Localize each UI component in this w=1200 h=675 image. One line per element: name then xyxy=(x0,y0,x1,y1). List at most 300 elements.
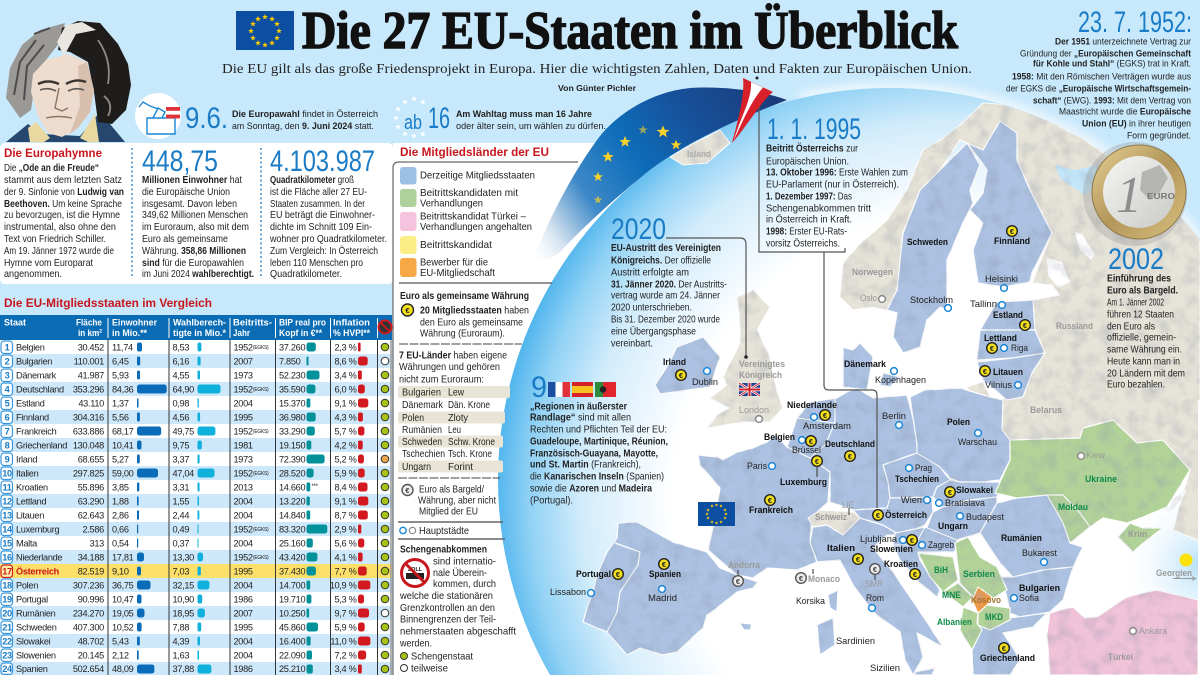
row: Kroatien: 11 xyxy=(2,482,12,492)
timeline: 1.1.1995: in Österreich in Kraft. xyxy=(766,214,852,226)
table header: Fläche xyxy=(76,318,102,328)
row: Finnland xyxy=(0,410,392,424)
map labels: candidates (green): MKD xyxy=(985,612,1003,623)
legend: Schengen: werden. xyxy=(399,638,432,650)
row: Bulgarien: 2 xyxy=(5,356,10,366)
Greece xyxy=(972,613,1047,675)
row: Luxemburg: Luxemburg xyxy=(16,524,59,534)
Finland xyxy=(967,121,1052,287)
map labels: member states: Ungarn xyxy=(938,521,968,532)
table header: tigte in Mio.* xyxy=(173,328,226,339)
row: Frankreich xyxy=(0,424,392,438)
row: Rumänien: 20 xyxy=(2,608,12,618)
Slovakia xyxy=(933,480,1000,507)
panel: area: EU beträgt die Einwohner- xyxy=(270,210,375,221)
row: Polen xyxy=(0,578,392,592)
legend: currencies table: Tsch. Krone xyxy=(448,449,492,460)
row: Slowakei: 5,43 xyxy=(112,636,129,646)
map markers: euro countries: € xyxy=(848,452,853,461)
Baltics xyxy=(967,300,1045,400)
row: Estland: 15.370 xyxy=(279,398,305,408)
timeline: 2020: 31. Jänner 2020. Der Austritts- xyxy=(611,280,727,290)
panel: population: die Europäische Union xyxy=(142,187,230,198)
row: Malta xyxy=(0,536,392,550)
table header: Einwohner xyxy=(112,318,157,328)
map labels: member states: Belgien xyxy=(764,432,795,443)
legend: Schengen: nehmerstaaten abgeschafft xyxy=(400,626,516,638)
North Macedonia xyxy=(978,605,1010,630)
panel: population: 448,75 xyxy=(142,145,218,178)
row: Estland: 0,98 xyxy=(172,398,189,408)
row: Litauen: 2004 xyxy=(234,510,253,520)
row: Lettland: 1,88 xyxy=(112,496,129,506)
row: Spanien xyxy=(0,662,392,675)
table header: Kopf in €** xyxy=(279,328,322,339)
Turkey xyxy=(1047,590,1198,675)
row: Malta: Malta xyxy=(16,538,38,548)
row: Lettland: Lettland xyxy=(16,496,46,506)
Sicily xyxy=(915,668,935,675)
panel: population: im Juni 2024 wahlberechtigt. xyxy=(142,269,254,280)
row: Österreich: 37.430 xyxy=(279,566,305,576)
timeline: 2020: Königreichs. Der offizielle xyxy=(611,256,711,266)
row: Luxemburg: 2.586 xyxy=(82,524,104,534)
legend: Schengen: Schengenabkommen xyxy=(400,545,487,556)
timeline: 2002: 2002 xyxy=(1108,243,1164,276)
row: Deutschland: 1952 xyxy=(234,384,253,394)
legend: currencies table xyxy=(398,386,510,473)
row: Dänemark: 3 xyxy=(5,370,10,380)
Kosovo xyxy=(972,587,992,613)
Italy xyxy=(810,518,943,675)
row: Dänemark: 5,93 xyxy=(112,370,129,380)
table header: Jahr xyxy=(233,328,250,339)
row: Belgien: 2,3 % xyxy=(334,342,357,352)
legend: member status: Verhandlungen angehalten xyxy=(420,222,532,233)
row: Italien: 10 xyxy=(2,468,12,478)
map labels: member states: Slowakei xyxy=(956,485,993,496)
timeline: 23.7.1952: Union (EU) in ihrer heutigen xyxy=(1082,118,1191,130)
row: Spanien: 3,4 % xyxy=(334,664,357,674)
panel: Europahymne: angenommen. xyxy=(4,269,62,280)
panel: Europahymne: Die Europahymne xyxy=(4,146,102,160)
map labels: capitals and islands: Budapest xyxy=(966,512,1004,523)
voting age text: oder älter sein, um wählen zu dürfen. xyxy=(456,121,606,132)
row: Kroatien xyxy=(0,480,392,494)
legend: euro as cash: Währung, aber nicht xyxy=(418,496,496,506)
map labels: non-members (grey): Norwegen xyxy=(852,267,893,278)
row: Kroatien: Kroatien xyxy=(16,482,48,492)
map markers: euro countries: € xyxy=(876,511,881,520)
row: Irland: Irland xyxy=(16,454,37,464)
row: Irland: 5,27 xyxy=(112,454,129,464)
timeline: 2020: 2020 xyxy=(611,213,666,246)
row: Griechenland: 4,2 % xyxy=(334,440,357,450)
row: Portugal: 10,90 xyxy=(172,594,194,604)
row: Slowakei xyxy=(0,634,392,648)
legend: Schengen: sind internatio- xyxy=(433,556,496,568)
panel: area: wohner pro Quadratkilometer. xyxy=(269,234,387,245)
map labels: capitals and islands: Wien xyxy=(901,495,922,506)
timeline: 1.1.1995: 13. Oktober 1996: Erste Wahlen zum xyxy=(766,168,908,178)
row: Rumänien: 10.250 xyxy=(279,608,305,618)
map labels: capitals and islands: Brüssel xyxy=(792,445,821,456)
row: Dänemark: 3,4 % xyxy=(334,370,357,380)
row: Bulgarien: 6,45 xyxy=(112,356,129,366)
row: Italien: 5,9 % xyxy=(334,468,357,478)
row: Griechenland: 1981 xyxy=(234,440,253,450)
map labels: member states: Frankreich xyxy=(749,505,793,516)
map labels: capitals and islands: Prag xyxy=(915,463,932,474)
map markers: euro countries: € xyxy=(910,536,915,545)
map labels: non-members (grey): Andorra xyxy=(728,560,761,571)
row: Slowenien: Slowenien xyxy=(16,650,56,660)
election date text: Die Europawahl findet in Österreich xyxy=(232,109,378,120)
legend: currencies table: Polen xyxy=(402,413,424,424)
map labels: candidates (green): BiH xyxy=(934,565,948,576)
row: Irland: 1973 xyxy=(234,454,253,464)
timeline: 2002: same Währung ein. xyxy=(1107,344,1182,356)
table header: Staat xyxy=(4,318,27,328)
Czechia xyxy=(883,453,950,498)
row: Malta: 0,54 xyxy=(112,538,129,548)
row: Lettland: 13.220 xyxy=(279,496,305,506)
row: Belgien: 1 xyxy=(5,342,10,352)
row: Litauen: 8,7 % xyxy=(334,510,357,520)
row: Slowakei: 11,0 % xyxy=(330,636,357,646)
flag: France xyxy=(548,382,570,397)
map labels: member states: Bulgarien xyxy=(1019,583,1060,594)
timeline: 2002: den Euro als xyxy=(1107,322,1155,332)
map labels: non-members (grey): Königreich xyxy=(739,370,782,381)
callout: outermost regions xyxy=(530,371,668,506)
callout: outermost regions: die Kanarischen Inseln (Spanien) xyxy=(530,472,664,482)
row: Lettland: 2004 xyxy=(234,496,253,506)
map labels: candidates (green): Serbien xyxy=(963,569,995,580)
map labels: member states: Finnland xyxy=(994,236,1030,247)
row: Polen: 18 xyxy=(2,580,12,590)
legend: euro as cash xyxy=(398,478,500,518)
panel: population xyxy=(132,145,254,280)
row: Belgien: Belgien xyxy=(16,342,45,352)
map labels: member states: Kroatien xyxy=(884,559,918,570)
row: Slowenien xyxy=(0,648,392,662)
row: Irland: 68.655 xyxy=(78,454,104,464)
row: Estland xyxy=(0,396,392,410)
row: Frankreich: 49,75 xyxy=(172,426,194,436)
legend: euro currency: 7 EU-Länder haben eigene xyxy=(399,350,507,362)
row: Portugal xyxy=(0,592,392,606)
row: Irland: 3,37 xyxy=(172,454,189,464)
row: Italien: 297.825 xyxy=(73,468,104,478)
election date text xyxy=(232,109,378,132)
timeline: 1.1.1995: Europäischen Union. xyxy=(766,156,849,168)
row: Litauen xyxy=(0,508,392,522)
row: Estland: 2004 xyxy=(234,398,253,408)
map labels: member states: Österreich xyxy=(885,510,927,521)
row: Österreich: 7,7 % xyxy=(334,566,357,576)
row: Slowenien: 2004 xyxy=(234,650,253,660)
map markers: euro countries: € xyxy=(990,344,995,353)
map markers: euro countries: € xyxy=(768,496,773,505)
panel: area: ist die Fläche aller 27 EU- xyxy=(270,187,367,198)
row: Deutschland: 6,0 % xyxy=(334,384,357,394)
map labels: capitals and islands: Vilnius xyxy=(985,380,1012,391)
row: Schweden: 10,52 xyxy=(112,622,134,632)
Poland xyxy=(910,388,1010,482)
row: Italien: 47,04 xyxy=(172,468,194,478)
panel: Europahymne: Beethoven. Um keine Sprache xyxy=(4,199,122,210)
row: Malta: 0,37 xyxy=(172,538,189,548)
row: Belgien: 30.452 xyxy=(78,342,104,352)
map labels: non-members (grey): Ankara xyxy=(1139,626,1168,637)
row: Frankreich: (EGKS) xyxy=(253,429,269,435)
right edge strip xyxy=(1198,400,1200,675)
legend: euro currency: Währungen und gehören xyxy=(399,362,500,373)
map markers: euro countries: € xyxy=(815,457,820,466)
timeline: 23.7.1952: für Kohle und Stahl“ (EGKS) trat in Kraft. xyxy=(1033,58,1191,70)
row: Polen: 307.236 xyxy=(73,580,104,590)
Italian islands xyxy=(817,590,838,655)
voting age xyxy=(404,102,450,135)
map markers: euro countries: € xyxy=(1010,227,1015,236)
row: Luxemburg: 2,9 % xyxy=(334,524,357,534)
legend: euro currency: € xyxy=(405,306,410,315)
row: Österreich: 82.519 xyxy=(78,566,104,576)
row: Kroatien: 2013 xyxy=(234,482,253,492)
row: Litauen: 13 xyxy=(2,510,12,520)
table header: BIP real pro xyxy=(279,318,326,328)
panel: Europahymne: instrumental, also ohne den xyxy=(4,222,116,233)
map labels: capitals and islands: Rom xyxy=(866,593,884,604)
legend: currencies table: Schw. Krone xyxy=(448,437,495,448)
row: Slowakei: Slowakei xyxy=(16,636,51,646)
row: Belgien: 1952 xyxy=(234,342,253,352)
timeline: 2002: Einführung des xyxy=(1107,274,1171,284)
row: Österreich: Österreich xyxy=(16,566,60,576)
row: Niederlande: 43.420 xyxy=(279,552,305,562)
timeline: 1.1.1995: Schengenabkommen tritt xyxy=(766,204,871,214)
legend: Schengen: nale Überein- xyxy=(433,567,487,579)
row: Luxemburg: 1952 xyxy=(234,524,253,534)
map labels: non-members (grey): Belarus xyxy=(1030,405,1062,416)
row: Finnland: 4,3 % xyxy=(334,412,357,422)
row: Estland: Estland xyxy=(16,398,45,408)
Crimea xyxy=(1118,523,1163,552)
row: Finnland: 5,56 xyxy=(112,412,129,422)
row: Deutschland: 64,90 xyxy=(172,384,194,394)
timeline: 2020: Austritt erfolgte am xyxy=(611,268,689,278)
map markers: euro countries: € xyxy=(913,570,918,579)
row: Frankreich: 5,7 % xyxy=(334,426,357,436)
legend: member status: Beitrittskandidaten mit xyxy=(420,188,518,199)
row: Frankreich: Frankreich xyxy=(16,426,57,436)
flag: EU on map xyxy=(698,502,735,526)
map markers: euro as cash: € xyxy=(873,565,878,574)
map labels: capitals and islands: Riga xyxy=(1011,343,1029,354)
map labels: member states: Luxemburg xyxy=(780,477,827,488)
row: Dänemark: 1973 xyxy=(234,370,253,380)
map labels: member states: Dänemark xyxy=(844,359,887,370)
Ireland xyxy=(655,337,720,394)
Albania xyxy=(960,607,982,650)
legend: currencies table: Schweden xyxy=(402,437,442,448)
legend: currencies table: Bulgarien xyxy=(402,388,441,398)
timeline: 23.7.1952: Der 1951 unterzeichnete Vertrag zur xyxy=(1055,36,1191,48)
row: Kroatien: 3,31 xyxy=(172,482,189,492)
table header: Beitritts- xyxy=(233,318,272,328)
row: Portugal: 19.710 xyxy=(279,594,305,604)
row: Bulgarien: 110.001 xyxy=(74,356,104,366)
legend title: Die Mitgliedsländer der EU xyxy=(400,145,549,159)
non-member land: Norway, Russia, Belarus xyxy=(840,103,1200,545)
row: Dänemark xyxy=(0,368,392,382)
map markers: euro countries: € xyxy=(1023,321,1028,330)
callout: outermost regions: Guadeloupe, Martinique, Réunion, xyxy=(530,436,668,448)
Hungary xyxy=(927,497,997,540)
callout: outermost regions: 9 xyxy=(531,371,547,404)
row: Griechenland: Griechenland xyxy=(16,440,67,450)
timeline: 1.1.1995: 1. 1. 1995 xyxy=(767,113,861,146)
table header xyxy=(0,315,392,340)
row: Luxemburg: 0,49 xyxy=(172,524,189,534)
map labels: capitals and islands: Ljubljana xyxy=(860,534,898,545)
map labels: candidates (green): Albanien xyxy=(937,617,972,628)
row: Österreich xyxy=(0,564,392,578)
callout lines xyxy=(666,105,877,508)
timeline: 2002: 20 Ländern mit dem xyxy=(1107,368,1185,380)
row: Italien: 59,00 xyxy=(112,468,134,478)
map: Europe xyxy=(583,103,1200,675)
timeline: 1.1.1995: vorsitz Österreichs. xyxy=(766,238,840,250)
timeline: 1.1.1995: Beitritt Österreichs zur xyxy=(766,142,858,154)
map labels: capitals and islands: Dublin xyxy=(692,377,718,388)
row: Malta: 15 xyxy=(2,538,12,548)
map labels: capitals and islands: Bukarest xyxy=(1022,548,1057,559)
Switzerland xyxy=(808,510,860,535)
timeline: 23.7.1952: Maastricht wurde die Europäische xyxy=(1059,106,1191,118)
map labels: member states: Deutschland xyxy=(825,439,875,450)
Slovenia and Croatia xyxy=(893,527,957,597)
map labels: non-members (grey): Russland xyxy=(1056,321,1093,332)
row: Finnland: 1995 xyxy=(234,412,253,422)
row: Deutschland: (EGKS) xyxy=(253,387,269,393)
timeline: 1.1.1995: EU-Parlament (nur in Österreich). xyxy=(766,178,899,190)
row: Portugal: 5,3 % xyxy=(334,594,357,604)
row: Niederlande: (EGKS) xyxy=(253,555,269,561)
row: Polen: 2004 xyxy=(234,580,253,590)
Serbia xyxy=(955,537,1007,600)
map labels: capitals and islands: Zagreb xyxy=(928,540,954,551)
map markers: capitals (blue) xyxy=(588,285,1047,611)
row: Schweden: 407.300 xyxy=(73,622,104,632)
panel: area: Zum Vergleich: In Österreich xyxy=(270,245,378,257)
map labels: capitals and islands: Korsika xyxy=(796,596,826,607)
Romania xyxy=(980,495,1083,577)
panel: Europahymne: Text von Friedrich Schiller. xyxy=(4,234,106,245)
panel: area: dichte im Schnitt 109 Ein- xyxy=(270,222,372,233)
legend: member status: Verhandlungen xyxy=(420,198,483,210)
row: Niederlande: 17,81 xyxy=(112,552,134,562)
row: Polen: Polen xyxy=(16,580,38,590)
legend: Schengen: Grenzkontrollen an den xyxy=(400,603,495,614)
legend: currencies table: Zloty xyxy=(448,413,469,424)
panel: area: Staaten zusammen. In der xyxy=(270,199,365,210)
panel: Europahymne: Am 19. Jänner 1972 wurde die xyxy=(4,246,114,257)
legend: euro as cash: Mitglied der EU xyxy=(419,506,478,518)
map markers: euro countries: € xyxy=(948,488,953,497)
row: Belgien: 8,53 xyxy=(172,342,189,352)
timeline: 23.7.1952 xyxy=(1006,6,1192,142)
small connector ticks xyxy=(813,466,875,580)
map labels: capitals and islands xyxy=(550,274,1057,674)
map labels: member states: Slowenien xyxy=(870,544,913,555)
row: Griechenland: 10,41 xyxy=(112,440,134,450)
row: Spanien: 48,09 xyxy=(112,664,134,674)
map labels: capitals and islands: Sizilien xyxy=(870,663,900,674)
row: Spanien: 502.654 xyxy=(73,664,104,674)
row: Malta: 2004 xyxy=(234,538,253,548)
map labels: member states: Rumänien xyxy=(1001,533,1042,544)
globe xyxy=(498,88,1200,675)
map markers: non-EU capitals (grey) xyxy=(756,296,1136,634)
map labels: candidates (green): MNE xyxy=(942,590,961,601)
callout: outermost regions: „Regionen in äußerster xyxy=(530,402,627,412)
panel: area: 4.103.987 xyxy=(270,145,375,178)
panel: area: leben 110 Menschen pro xyxy=(270,258,363,269)
Germany and Benelux xyxy=(787,388,917,510)
row: Lettland: 63.290 xyxy=(78,496,104,506)
timeline: 2002 xyxy=(1107,243,1185,390)
map labels: non-members (grey): Krim xyxy=(1128,529,1147,540)
map labels: member states: Tschechien xyxy=(895,474,939,485)
row: Polen: 32,15 xyxy=(172,580,194,590)
panel: population: Euro als gemeinsame xyxy=(142,234,228,245)
Benelux borders xyxy=(798,398,836,458)
row: Finnland: 304.316 xyxy=(73,412,104,422)
flag: Austrian pennant xyxy=(732,76,773,143)
row: Luxemburg: 83.320 xyxy=(279,524,305,534)
row: Deutschland xyxy=(0,382,392,396)
legend: euro currency xyxy=(399,283,552,386)
United Kingdom xyxy=(707,290,783,428)
row: Litauen: Litauen xyxy=(16,510,44,520)
icon: one euro coin: 1 xyxy=(1116,167,1142,224)
panel: Europahymne: Hymne vom Europarat xyxy=(4,258,93,269)
map markers: euro as cash: € xyxy=(799,574,804,583)
map markers: euro countries: € xyxy=(856,555,861,564)
voting age: ab xyxy=(404,112,422,134)
row: Slowakei: 16.400 xyxy=(279,636,305,646)
row: Frankreich: 633.886 xyxy=(73,426,104,436)
row: Irland: 9 xyxy=(5,454,10,464)
panel: Europahymne: zu bevorzugen, ist die Hymne xyxy=(4,210,120,221)
row: Slowakei: 22 xyxy=(2,636,12,646)
timeline: 1.1.1995: 1. Dezember 1997: Das xyxy=(766,192,852,202)
Bulgaria xyxy=(1000,567,1073,617)
icon: star ring xyxy=(393,96,426,138)
row: Estland: 1,37 xyxy=(112,398,129,408)
row: Rumänien: 9,7 % xyxy=(334,608,357,618)
row: Luxemburg xyxy=(0,522,392,536)
timeline: 1.1.1995 xyxy=(766,113,908,250)
row: Kroatien: 14.660 xyxy=(279,482,305,492)
legend: Schengen: Binnengrenzen der Teil- xyxy=(400,614,496,626)
Ukraine and Moldova xyxy=(995,420,1190,543)
row: Luxemburg: (EGKS) xyxy=(253,527,269,533)
panel: Europahymne: Die „Ode an die Freude“ xyxy=(4,163,99,174)
row: Österreich: 7,03 xyxy=(172,566,189,576)
